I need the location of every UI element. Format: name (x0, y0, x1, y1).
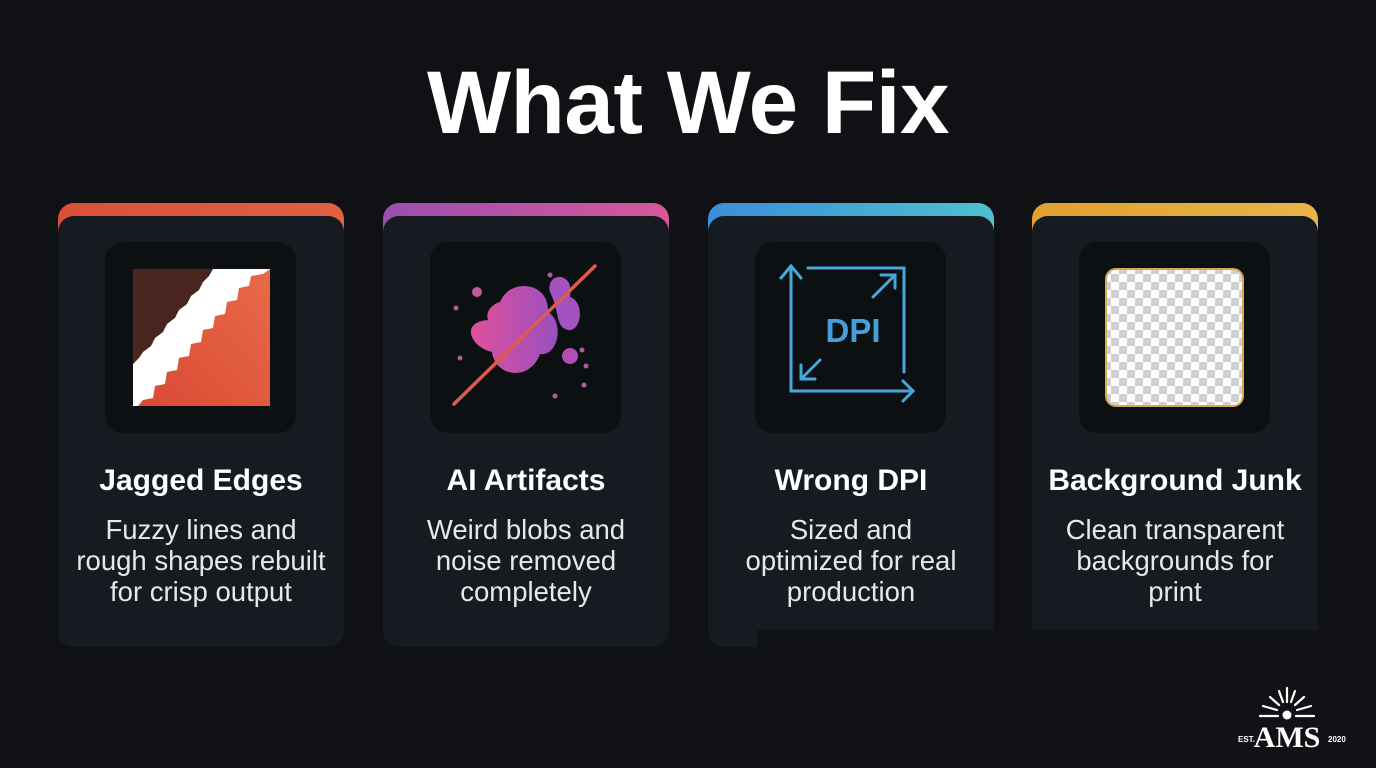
panel: jagged edges (58, 203, 344, 647)
description: optimized for real (746, 545, 956, 576)
icon: dpi resize: DPI (825, 312, 881, 349)
bottom-right overlay (757, 630, 1376, 768)
title: What We Fix (427, 52, 949, 152)
description: noise removed (436, 545, 616, 576)
description: rough shapes rebuilt (76, 545, 326, 576)
description: print (1148, 576, 1202, 607)
icon: jagged edge (105, 242, 296, 433)
icon: dpi resize (755, 242, 946, 433)
logo: AMS est 2020 (1238, 686, 1346, 752)
heading: Jagged Edges (99, 464, 303, 497)
description: for crisp output (110, 576, 292, 607)
icon: blob crossed out (430, 242, 621, 433)
description (76, 514, 326, 607)
description: completely (460, 576, 592, 607)
description: Weird blobs and (427, 514, 625, 545)
icon: transparent checkerboard (1079, 242, 1270, 433)
description: Sized and (790, 514, 912, 545)
logo: AMS est 2020: EST. (1238, 735, 1255, 744)
description (746, 514, 956, 607)
logo: AMS est 2020: 2020 (1328, 735, 1346, 744)
heading: Wrong DPI (775, 464, 927, 497)
description (427, 514, 625, 607)
description: Fuzzy lines and (105, 514, 297, 545)
description: Clean transparent (1066, 514, 1284, 545)
heading: Background Junk (1048, 464, 1302, 497)
description (1066, 514, 1284, 607)
panel: wrong dpi (708, 203, 994, 647)
description: backgrounds for (1076, 545, 1274, 576)
panel: ai artifacts (383, 203, 669, 647)
panel: background junk (1032, 203, 1318, 647)
description: production (787, 576, 915, 607)
heading: AI Artifacts (447, 464, 605, 497)
